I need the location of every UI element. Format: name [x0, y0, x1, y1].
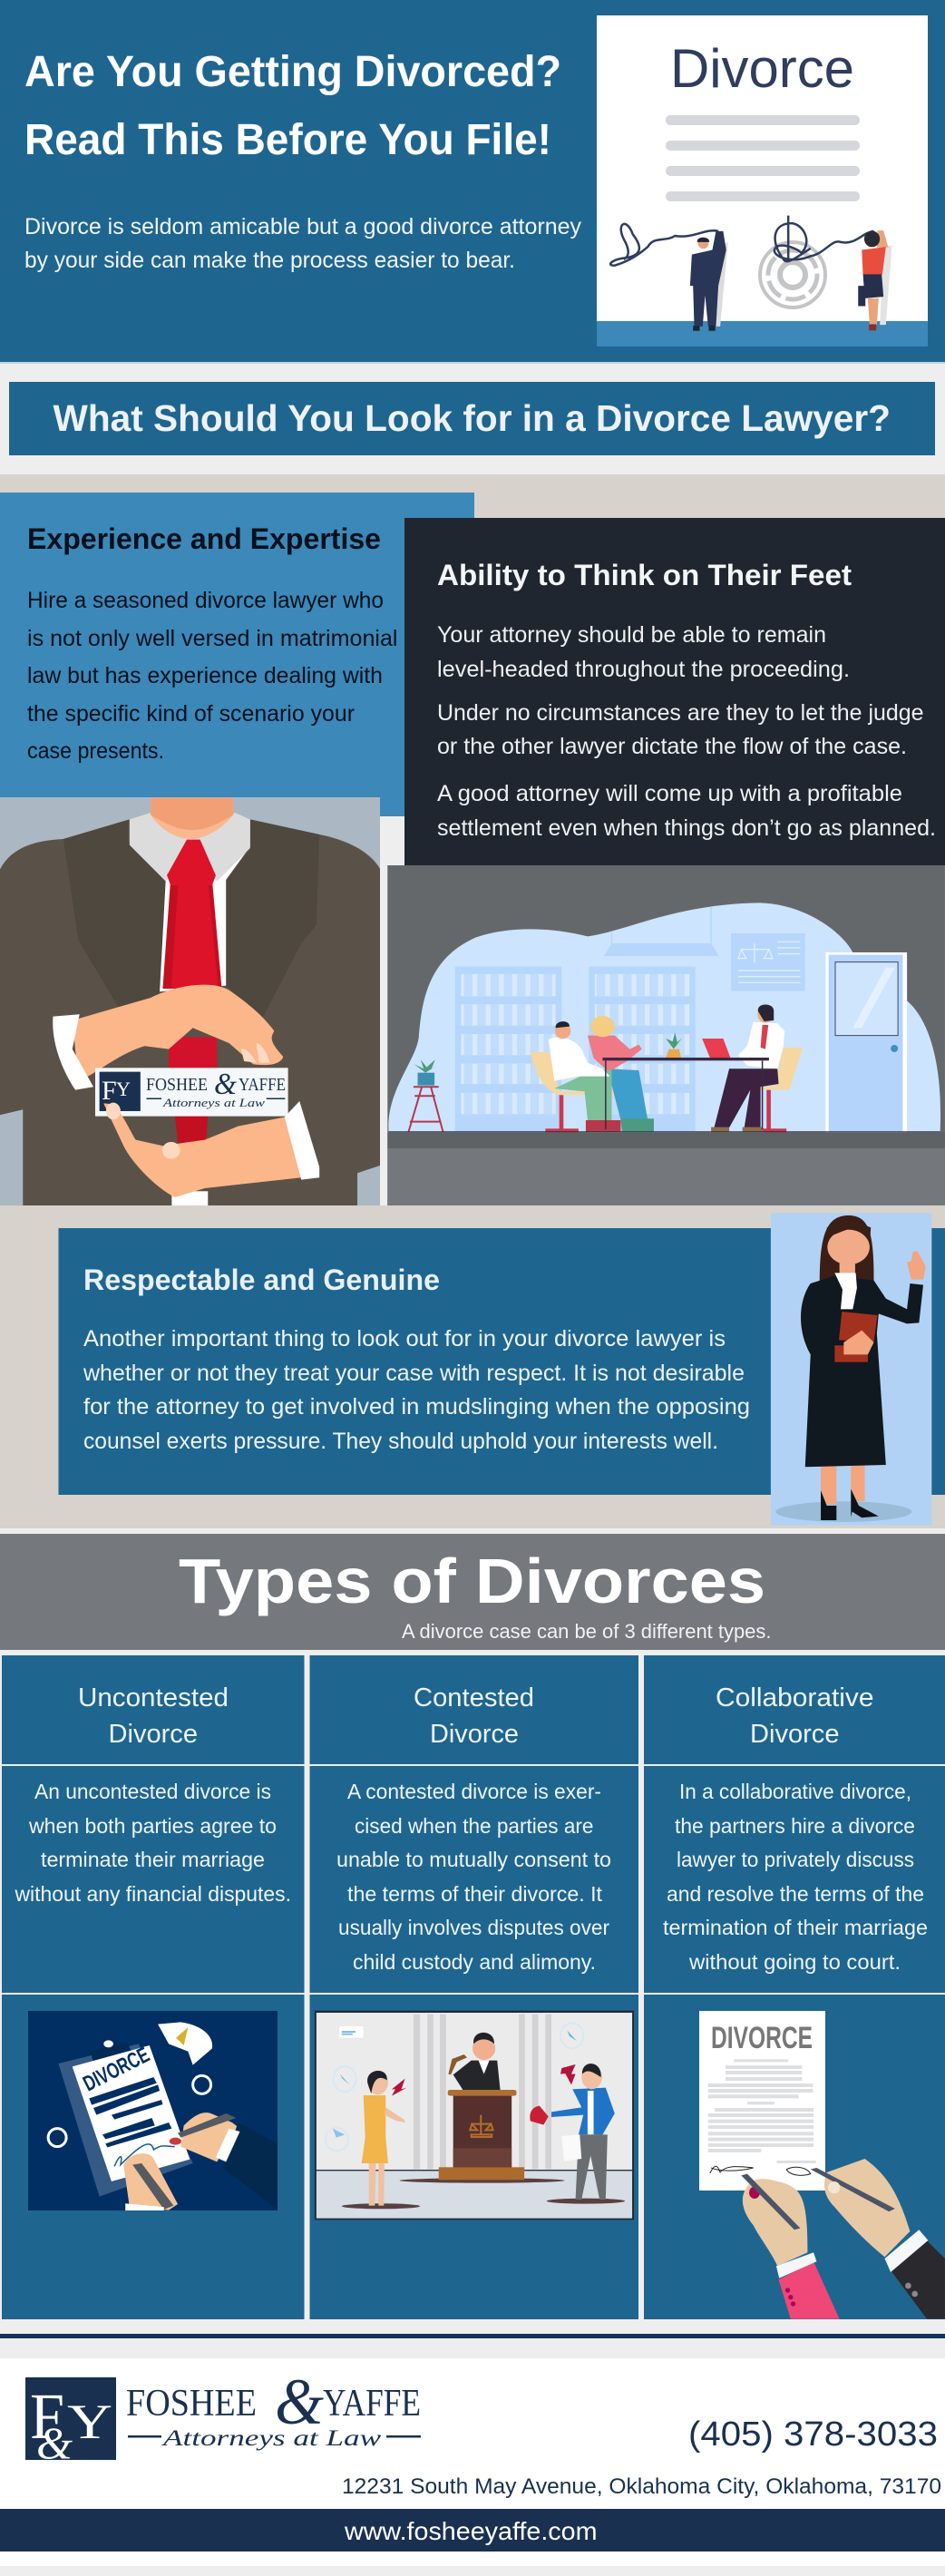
- text: uncontested body: terminate their marriage: [41, 1848, 265, 1871]
- text: collaborative body: lawyer to privately discuss: [677, 1848, 914, 1871]
- text: experience body: Hire a seasoned divorce lawyer who: [27, 588, 384, 613]
- illustration: divorce document with signing figures: [597, 15, 928, 346]
- text: respectable body: [83, 1326, 750, 1454]
- text: experience body: case presents.: [27, 738, 164, 764]
- panel: uncontested divorce column: [2, 1655, 305, 2319]
- panel: header: [0, 0, 945, 364]
- panel: footer: [0, 2358, 945, 2566]
- panel: collaborative divorce column: [644, 1655, 945, 2319]
- heading: uncontested: Uncontested: [78, 1683, 229, 1712]
- logo: Foshee and Yaffe: &: [36, 2417, 73, 2468]
- logo: Foshee and Yaffe: Y: [67, 2395, 112, 2449]
- logo: Foshee and Yaffe: Attorneys at Law: [161, 2426, 381, 2451]
- text: contested body: the terms of their divorce. It: [347, 1882, 603, 1906]
- heading: uncontested: Divorce: [109, 1720, 198, 1749]
- logo: Foshee and Yaffe: [25, 2366, 421, 2468]
- panel: experience and expertise: [0, 493, 474, 816]
- heading: ability: Ability to Think on Their Feet: [437, 559, 852, 591]
- heading: collaborative: Divorce: [750, 1720, 840, 1749]
- text: collaborative body: without going to court.: [688, 1950, 901, 1974]
- heading: uncontested: [78, 1683, 229, 1749]
- text: ability body: A good attorney will come up with a profitable: [437, 781, 902, 806]
- text: contested body: A contested divorce is exer-: [347, 1780, 601, 1803]
- text: uncontested body: when both parties agree to: [28, 1814, 277, 1838]
- text: ability body: Your attorney should be able to remain: [437, 622, 826, 648]
- panel: ability to think on their feet: [404, 518, 945, 865]
- text: uncontested body: [15, 1780, 291, 1906]
- heading: collaborative: [716, 1683, 874, 1749]
- logo on card: FOSHEE: [146, 1075, 208, 1095]
- logo: Foshee and Yaffe: &: [275, 2366, 324, 2438]
- illustration: courtroom dispute: [315, 2011, 634, 2220]
- text: collaborative body: [663, 1780, 928, 1974]
- illustration: signing divorce clipboard: [28, 2011, 278, 2210]
- text: collaborative body: the partners hire a divorce: [675, 1814, 915, 1838]
- text: ability body: [437, 622, 936, 841]
- text: ability body: or the other lawyer dictate the flow of the case.: [437, 734, 907, 759]
- panel: respectable and genuine: [58, 1228, 945, 1495]
- text: uncontested body: without any financial disputes.: [15, 1882, 291, 1906]
- text: contested body: [336, 1780, 611, 1974]
- text: contested body: usually involves disputes over: [338, 1916, 609, 1939]
- text: respectable body: counsel exerts pressure. They should uphold your interests well.: [83, 1429, 718, 1454]
- subtitle: A divorce case can be of 3 different types.: [402, 1620, 771, 1643]
- heading: respectable: Respectable and Genuine: [83, 1264, 440, 1296]
- illustration: two hands signing divorce paper: [699, 2011, 945, 2319]
- text: respectable body: for the attorney to get involved in mudslinging when the opposing: [83, 1394, 750, 1420]
- panel: section heading: [9, 382, 935, 455]
- text: experience body: is not only well versed in matrimonial: [27, 626, 397, 651]
- illustration: woman lawyer in robe: [771, 1213, 931, 1526]
- text: collaborative body: In a collaborative divorce,: [679, 1780, 911, 1803]
- text: experience body: the specific kind of scenario your: [27, 701, 355, 727]
- logo on card: &: [214, 1068, 238, 1101]
- logo: Foshee and Yaffe: F: [30, 2380, 64, 2453]
- text: contested body: cised when the parties are: [355, 1814, 593, 1838]
- intro text: [24, 214, 581, 273]
- divider: navy rule: [0, 2334, 945, 2338]
- logo on card: F: [102, 1076, 117, 1106]
- contact: phone: (405) 378-3033: [688, 2415, 938, 2454]
- logo on card: YAFFE: [239, 1075, 286, 1095]
- illustration: signing divorce clipboard: DIVORCE: [79, 2043, 153, 2096]
- text: respectable body: whether or not they treat your case with respect. It is not desirable: [83, 1361, 745, 1386]
- contact: website bar: www.fosheeyaffe.com: [344, 2517, 597, 2545]
- text: uncontested body: An uncontested divorce is: [34, 1780, 271, 1803]
- heading: experience: Experience and Expertise: [27, 522, 381, 555]
- text: collaborative body: and resolve the terms of the: [667, 1882, 924, 1906]
- intro text: by your side can make the process easier to bear.: [24, 248, 515, 273]
- illustration: attorney meeting in office: [387, 865, 945, 1205]
- title: Read This Before You File!: [24, 116, 551, 164]
- illustration: two hands signing divorce paper: DIVORCE: [711, 2021, 813, 2055]
- panel: section heading: What Should You Look for in a Divorce Lawyer?: [53, 397, 891, 439]
- contact: website bar: [0, 2509, 945, 2552]
- text: contested body: child custody and alimony.: [353, 1950, 596, 1974]
- title: [24, 48, 561, 164]
- text: collaborative body: termination of their marriage: [663, 1916, 928, 1939]
- panel: types of divorces heading: [0, 1534, 945, 1650]
- text: experience body: law but has experience dealing with: [27, 663, 383, 688]
- logo on card: [102, 1074, 285, 1108]
- contact: address: 12231 South May Avenue, Oklahoma City, Oklahoma, 73170: [342, 2474, 941, 2499]
- logo: Foshee and Yaffe: YAFFE: [323, 2383, 421, 2425]
- intro text: Divorce is seldom amicable but a good divorce attorney: [24, 214, 581, 239]
- logo on card: Y: [116, 1078, 131, 1100]
- heading: collaborative: Collaborative: [716, 1683, 874, 1712]
- panel: types of divorces heading: Types of Divorces: [179, 1546, 765, 1616]
- heading: contested: Divorce: [430, 1720, 519, 1749]
- beige backdrop: [0, 474, 945, 1534]
- text: respectable body: Another important thing to look out for in your divorce lawyer is: [83, 1326, 726, 1351]
- panel: contested divorce column: [310, 1655, 638, 2319]
- logo on card: Attorneys at Law: [162, 1096, 265, 1109]
- title: Are You Getting Divorced?: [24, 48, 561, 96]
- illustration: divorce document with signing figures: Divorce: [670, 38, 854, 99]
- text: ability body: Under no circumstances are they to let the judge: [437, 700, 923, 726]
- logo: Foshee and Yaffe: FOSHEE: [126, 2383, 257, 2425]
- heading: contested: [414, 1683, 534, 1749]
- illustration: lawyer handing business card: [0, 797, 380, 1206]
- heading: contested: Contested: [414, 1683, 534, 1712]
- text: experience body: [27, 588, 397, 764]
- text: ability body: level-headed throughout the proceeding.: [437, 657, 850, 682]
- text: ability body: settlement even when things don’t go as planned.: [437, 815, 936, 841]
- text: contested body: unable to mutually consent to: [336, 1848, 611, 1871]
